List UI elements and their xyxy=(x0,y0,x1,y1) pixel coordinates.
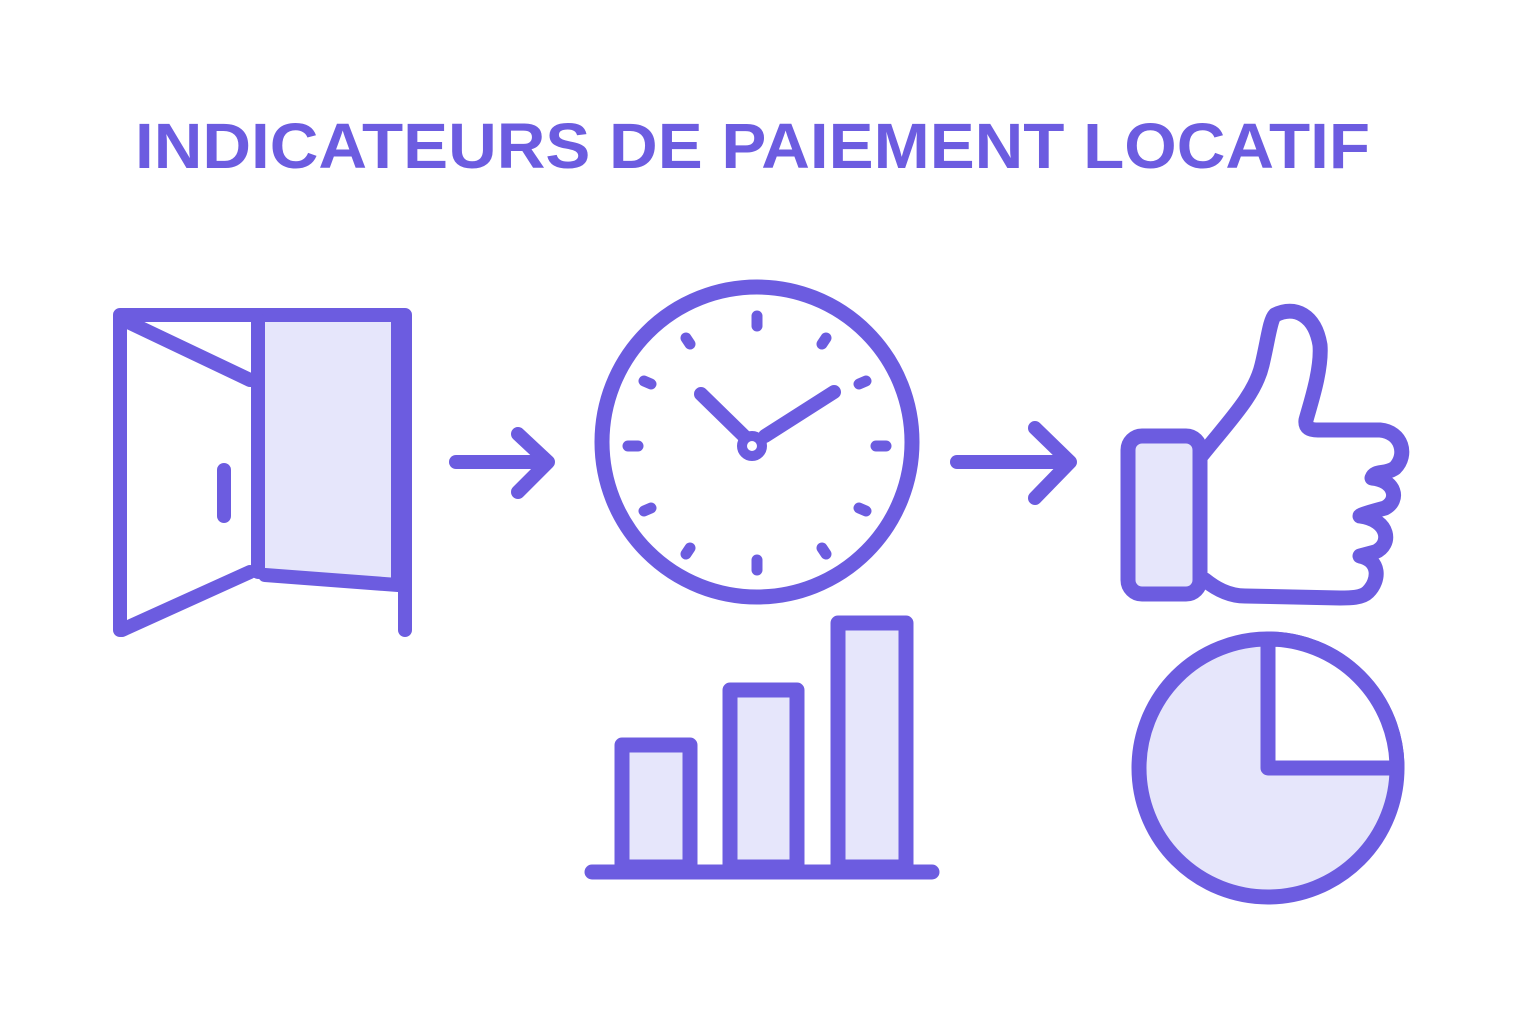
pie chart xyxy=(1139,639,1397,897)
title: INDICATEURS DE PAIEMENT LOCATIF xyxy=(135,110,1370,182)
arrow 2 xyxy=(957,428,1070,498)
arrow 1 xyxy=(456,434,548,492)
cuff xyxy=(1128,436,1200,594)
bar chart xyxy=(592,623,932,872)
icon: clock xyxy=(602,287,912,597)
door inner panel xyxy=(262,318,400,578)
icon: open door xyxy=(120,315,405,630)
icon: thumbs up xyxy=(1128,311,1402,598)
